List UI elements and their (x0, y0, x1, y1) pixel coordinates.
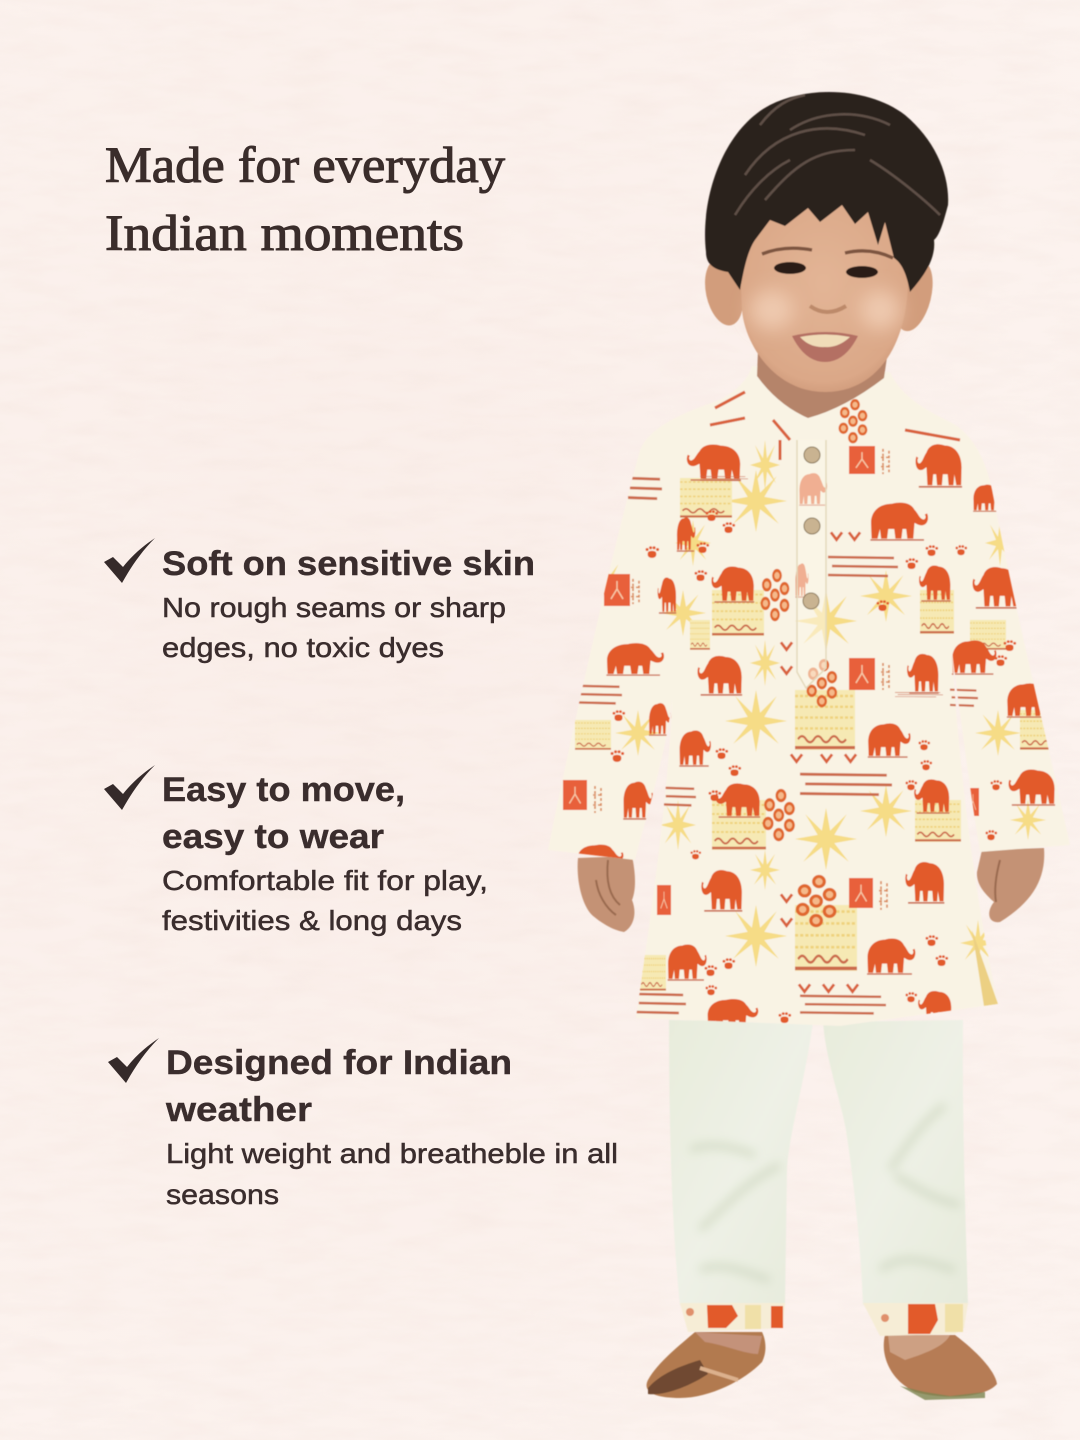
icon: check mark (104, 765, 155, 810)
benefit: designed for Indian weather (108, 1038, 618, 1210)
right shoe (884, 1335, 997, 1400)
print: yellow sun motifs (590, 440, 1046, 967)
left hand (578, 856, 635, 932)
print: ruled lines (578, 476, 978, 1013)
print: red square tiles (563, 446, 979, 915)
cuff (680, 1303, 785, 1332)
hair (705, 92, 948, 292)
benefit: designed for Indian weather: weather (165, 1091, 312, 1129)
benefit: soft on sensitive skin: Soft on sensitive skin (162, 545, 535, 583)
print: collar and shoulder details (710, 392, 960, 460)
benefit: soft on sensitive skin: edges, no toxic dyes (162, 632, 444, 663)
placket with buttons (797, 440, 826, 688)
cuff (863, 1303, 968, 1336)
benefit: easy to move, easy to wear: Easy to move, (162, 771, 405, 809)
trousers: left leg (669, 1020, 813, 1332)
title: Made for everyday (105, 138, 506, 194)
right hand (977, 848, 1044, 922)
illustration: smiling child in kurta (548, 92, 1070, 1400)
benefit: soft on sensitive skin (104, 538, 535, 663)
eyes and brows (762, 248, 893, 258)
left shoe (647, 1332, 765, 1398)
icon: check mark (104, 538, 155, 583)
neck (757, 350, 888, 418)
benefit: easy to move, easy to wear: easy to wear (162, 818, 384, 856)
benefit: designed for Indian weather: Light weight and breatheble in all (166, 1138, 618, 1169)
smile (792, 332, 858, 362)
print: flower clusters (762, 400, 866, 926)
print: yellow wave blocks (575, 478, 1060, 991)
benefit: easy to move, easy to wear: festivities & long days (162, 905, 462, 936)
benefit: designed for Indian weather: seasons (166, 1179, 279, 1210)
benefit: easy to move, easy to wear (104, 765, 488, 936)
nose (810, 306, 846, 312)
face (739, 194, 908, 392)
print: paw prints (611, 510, 1016, 1023)
print: elephants (577, 444, 1055, 1030)
benefit: easy to move, easy to wear: Comfortable fit for play, (162, 865, 488, 896)
print: chevrons (781, 532, 860, 992)
benefit: designed for Indian weather: Designed for Indian (166, 1044, 512, 1082)
ears (699, 255, 939, 335)
title (105, 138, 506, 262)
kurta with printed pattern (548, 366, 1070, 1030)
benefit: soft on sensitive skin: No rough seams or sharp (162, 592, 506, 623)
title: Indian moments (105, 206, 464, 262)
icon: check mark (108, 1038, 159, 1083)
trousers: right leg (823, 1020, 968, 1336)
side fold shadow (972, 930, 998, 1006)
